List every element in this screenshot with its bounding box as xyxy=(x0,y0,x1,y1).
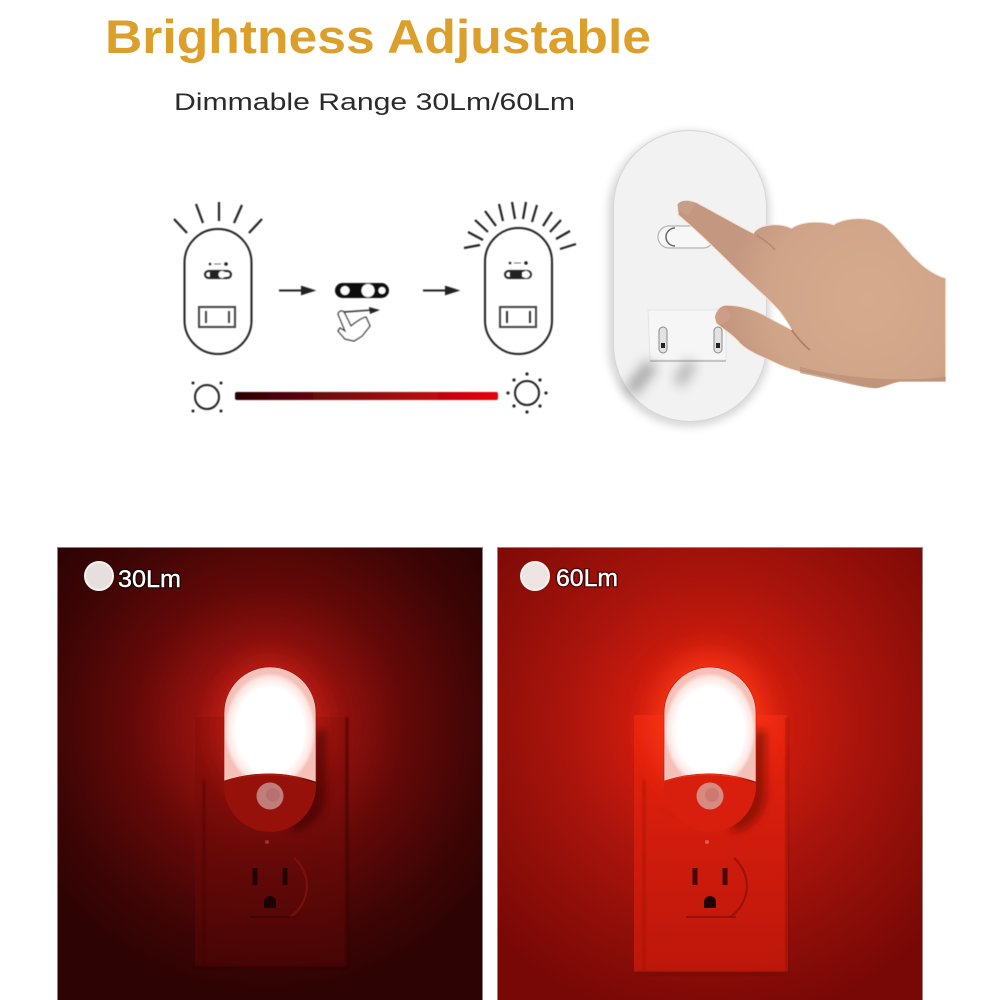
panel: 60Lm photo xyxy=(497,547,923,1000)
slide switch xyxy=(658,226,714,248)
icon: slider with swiping hand xyxy=(335,283,389,341)
title: Brightness Adjustable xyxy=(105,10,651,63)
outlet xyxy=(250,840,307,917)
icon: dim sun xyxy=(192,382,222,412)
night light glow xyxy=(652,653,768,797)
wall plate xyxy=(634,715,788,973)
label: 30Lm xyxy=(84,561,181,593)
wall plate xyxy=(195,717,348,967)
plug prongs xyxy=(630,310,726,392)
night light body xyxy=(224,667,316,832)
night light glow xyxy=(218,660,322,800)
label: 60Lm: 60Lm xyxy=(556,565,618,592)
night light body xyxy=(664,667,756,832)
subtitle: Dimmable Range 30Lm/60Lm xyxy=(174,89,575,116)
label: 60Lm: 60Lm xyxy=(556,565,618,592)
arrow: second step xyxy=(423,287,457,294)
diagram: brightness adjustment steps xyxy=(174,202,576,414)
night light shadow xyxy=(290,730,326,832)
label: 30Lm: 30Lm xyxy=(118,566,181,593)
night light shadow xyxy=(730,730,766,832)
night light back plate xyxy=(608,130,770,427)
label: 30Lm: 30Lm xyxy=(118,566,181,593)
arrow: first step xyxy=(279,287,313,294)
brightness gradient bar xyxy=(235,392,498,400)
hand xyxy=(677,201,946,388)
photo: finger sliding the switch xyxy=(608,130,946,427)
icon: bright lamp with many rays xyxy=(464,202,576,354)
icon: dim lamp with few rays xyxy=(174,202,262,354)
panel: 30Lm photo xyxy=(57,547,483,1000)
icon: bright sun xyxy=(506,372,548,414)
outlet xyxy=(686,840,747,917)
label: 60Lm xyxy=(520,561,618,592)
